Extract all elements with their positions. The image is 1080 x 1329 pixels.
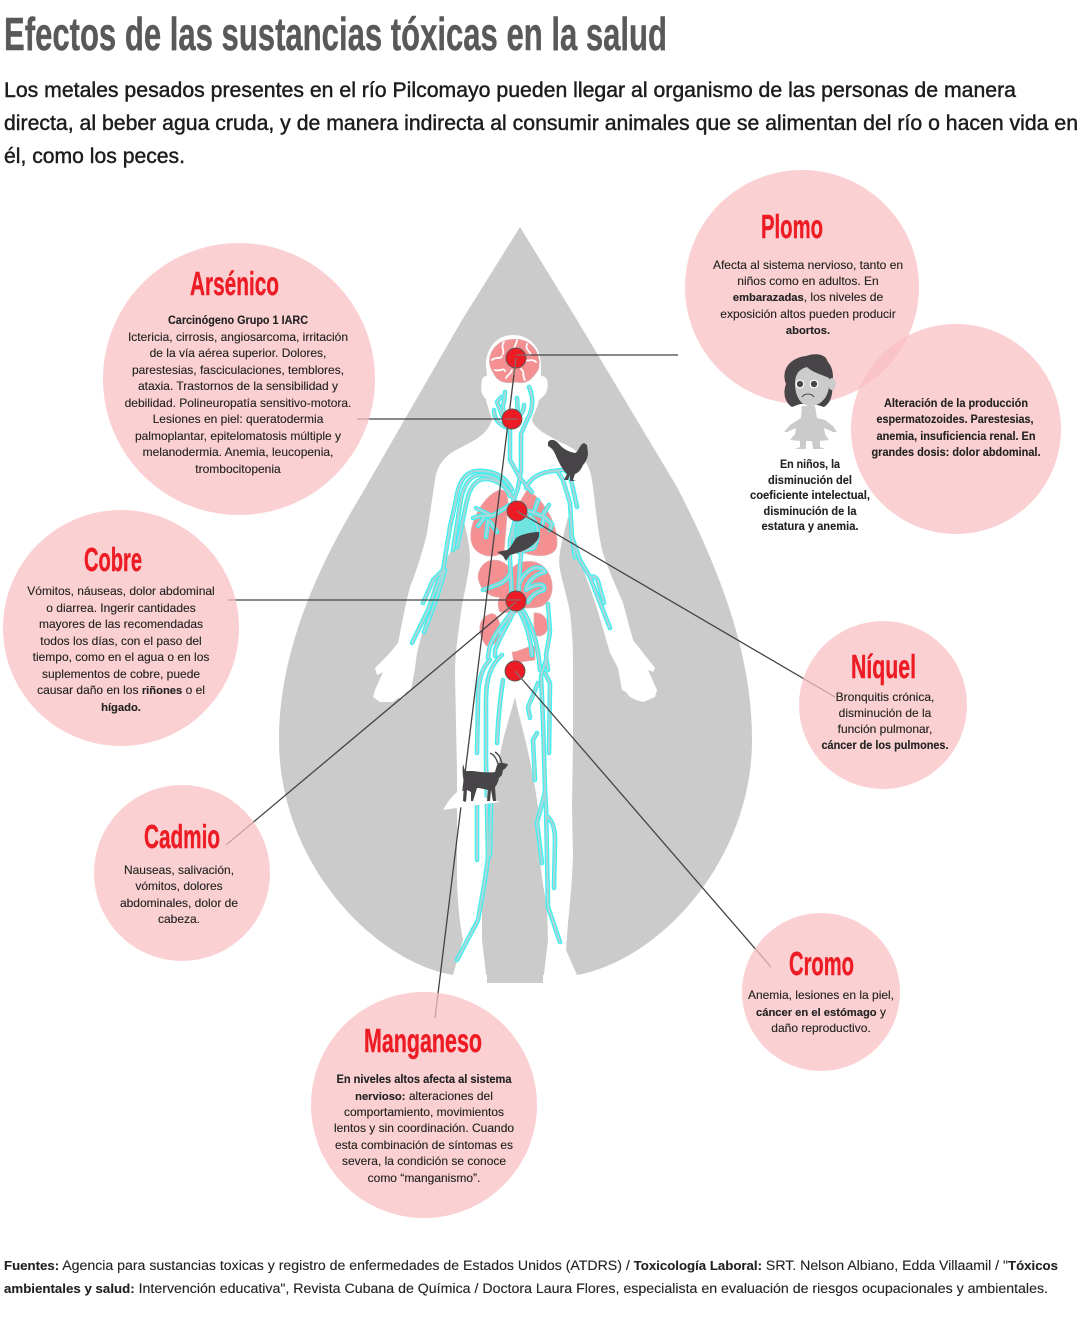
text: child effects: disminución de la [764, 504, 857, 518]
panel: plomo en adultos [851, 324, 1061, 534]
leader line: manganeso [435, 358, 516, 1018]
text: alteración [872, 396, 1040, 459]
text: manganeso: En niveles altos afecta al sistema [336, 1072, 512, 1086]
text: níquel: disminución de la [839, 706, 932, 720]
text: níquel [822, 690, 948, 752]
icon: child [784, 354, 837, 449]
text: cromo [748, 988, 894, 1035]
text: cobre: o diarrea. Ingerir cantidades [46, 601, 196, 615]
text: cobre: tiempo, como en el agua o en los [33, 650, 209, 664]
panel: arsénico [103, 243, 375, 515]
text: cobre: suplementos de cobre, puede [42, 667, 200, 681]
sources footer: ambientales y salud: Intervención educativa", Revista Cubana de Química / Doctora Laura Flores, especialista en evaluación de riesgos ocupacionales y ambientales. [4, 1281, 1048, 1297]
intro paragraph: Los metales pesados presentes en el río Pilcomayo pueden llegar al organismo de las personas de manera [4, 78, 1016, 102]
text: arsénico [125, 313, 351, 476]
marker line tips [505, 355, 530, 683]
text: manganeso: lentos y sin coordinación. Cuando [334, 1121, 514, 1135]
heading: arsénico: Arsénico [190, 265, 279, 302]
text: alteración: grandes dosis: dolor abdominal. [872, 445, 1040, 459]
heading: níquel: Níquel [851, 648, 916, 685]
leader line: plomo [516, 354, 678, 356]
text: plomo: niños como en adultos. En [737, 274, 879, 288]
text: níquel: Bronquitis crónica, [836, 690, 934, 704]
leader line: níquel [517, 511, 835, 697]
stomach and liver [478, 560, 552, 613]
text: cromo: Anemia, lesiones en la piel, [748, 988, 894, 1002]
title: Efectos de las sustancias tóxicas en la salud [4, 8, 667, 60]
text: arsénico: Ictericia, cirrosis, angiosarcoma, irritación [128, 330, 348, 344]
intro paragraph: él, como los peces. [4, 144, 185, 168]
text: níquel: cáncer de los pulmones. [822, 738, 948, 752]
leader line: cadmio [226, 602, 516, 845]
heading: manganeso: Manganeso [364, 1022, 482, 1059]
icon: fish [497, 532, 539, 561]
heart [511, 517, 539, 552]
text: alteración: anemia, insuficiencia renal. En [876, 429, 1036, 443]
text: arsénico: Carcinógeno Grupo 1 IARC [168, 313, 308, 327]
sources footer: Fuentes: Agencia para sustancias toxicas y registro de enfermedades de Estados Unidos (ATDRS) / Toxicología Laboral: SRT. Nelson Albiano, Edda Villaamil / "Tóxicos [4, 1258, 1058, 1274]
panel: manganeso [311, 992, 537, 1218]
panel: cromo [742, 913, 900, 1071]
text: arsénico: de la vía aérea superior. Dolores, [150, 346, 326, 360]
text: cobre: hígado. [101, 702, 141, 714]
lungs [471, 490, 557, 556]
text: arsénico: trombocitopenia [195, 462, 281, 476]
text: cromo: cáncer en el estómago y [756, 1005, 886, 1019]
text: plomo: abortos. [786, 325, 830, 337]
text: cadmio: abdominales, dolor de [120, 896, 238, 910]
text: cromo: daño reproductivo. [771, 1021, 871, 1035]
panel: níquel [799, 621, 967, 789]
icon: chicken [548, 440, 588, 481]
text: cobre [27, 584, 215, 714]
heading: cromo: Cromo [789, 945, 854, 982]
organs [471, 490, 557, 663]
red markers [502, 348, 527, 681]
sources footer [4, 1258, 1058, 1297]
text: cobre: causar daño en los riñones o el [37, 683, 205, 697]
text: arsénico: melanodermia. Anemia, leucopenia, [143, 445, 333, 459]
text: manganeso: nervioso: alteraciones del [355, 1089, 493, 1103]
heading: plomo: Plomo [761, 208, 823, 245]
grey water drop [279, 227, 752, 983]
text: plomo: embarazadas, los niveles de [733, 290, 883, 304]
text: manganeso: esta combinación de síntomas es [335, 1138, 513, 1152]
text: cadmio [120, 863, 238, 926]
intestines [480, 613, 548, 663]
intro paragraph: directa, al beber agua cruda, y de manera indirecta al consumir animales que se alimentan del río o hacen vida en [4, 111, 1078, 135]
white sliver over line [443, 790, 500, 810]
text: arsénico: palmoplantar, epitelomatosis múltiple y [135, 429, 341, 443]
circulatory system [412, 387, 610, 960]
panel: cobre [3, 510, 239, 746]
text: cobre: todos los días, con el paso del [40, 634, 202, 648]
text: child effects: En niños, la [780, 457, 840, 471]
text: manganeso: severa, la condición se conoce [342, 1154, 506, 1168]
text: arsénico: parestesias, fasciculaciones, temblores, [132, 363, 344, 377]
text: arsénico: ataxia. Trastornos de la sensibilidad y [138, 379, 338, 393]
text: alteración: espermatozoides. Parestesias, [876, 412, 1034, 426]
text: child effects: estatura y anemia. [762, 519, 858, 533]
text: cadmio: cabeza. [158, 912, 200, 926]
intro paragraph [4, 78, 1078, 168]
text: níquel: función pulmonar, [838, 722, 932, 736]
panel: cadmio [94, 785, 270, 961]
text: manganeso: como “manganismo”. [368, 1171, 480, 1185]
leader line: cobre [228, 599, 516, 601]
leader line: cromo [515, 671, 771, 967]
heading: cadmio: Cadmio [144, 818, 220, 855]
text: cobre: mayores de las recomendadas [39, 617, 203, 631]
text: arsénico: debilidad. Polineuropatía sensitivo-motora. [125, 396, 351, 410]
leader line: arsénico [357, 418, 512, 420]
text: plomo: exposición altos pueden producir [720, 307, 896, 321]
human body silhouette [373, 335, 657, 1000]
icon: goat [463, 752, 508, 802]
text: cadmio: Nauseas, salivación, [124, 863, 234, 877]
heading: cobre: Cobre [84, 541, 142, 578]
text: manganeso [334, 1072, 514, 1185]
text: arsénico: Lesiones en piel: queratodermia [153, 412, 324, 426]
text: child effects [750, 457, 870, 533]
brain [490, 339, 539, 383]
text: cadmio: vómitos, dolores [135, 879, 223, 893]
text: plomo [713, 258, 903, 337]
text: cobre: Vómitos, náuseas, dolor abdominal [27, 584, 215, 598]
text: manganeso: comportamiento, movimientos [344, 1105, 504, 1119]
panel: plomo [685, 170, 919, 404]
text: alteración: Alteración de la producción [884, 396, 1028, 410]
text: plomo: Afecta al sistema nervioso, tanto en [713, 258, 903, 272]
text: child effects: disminución del [768, 473, 852, 487]
text: child effects: coeficiente intelectual, [750, 488, 870, 502]
